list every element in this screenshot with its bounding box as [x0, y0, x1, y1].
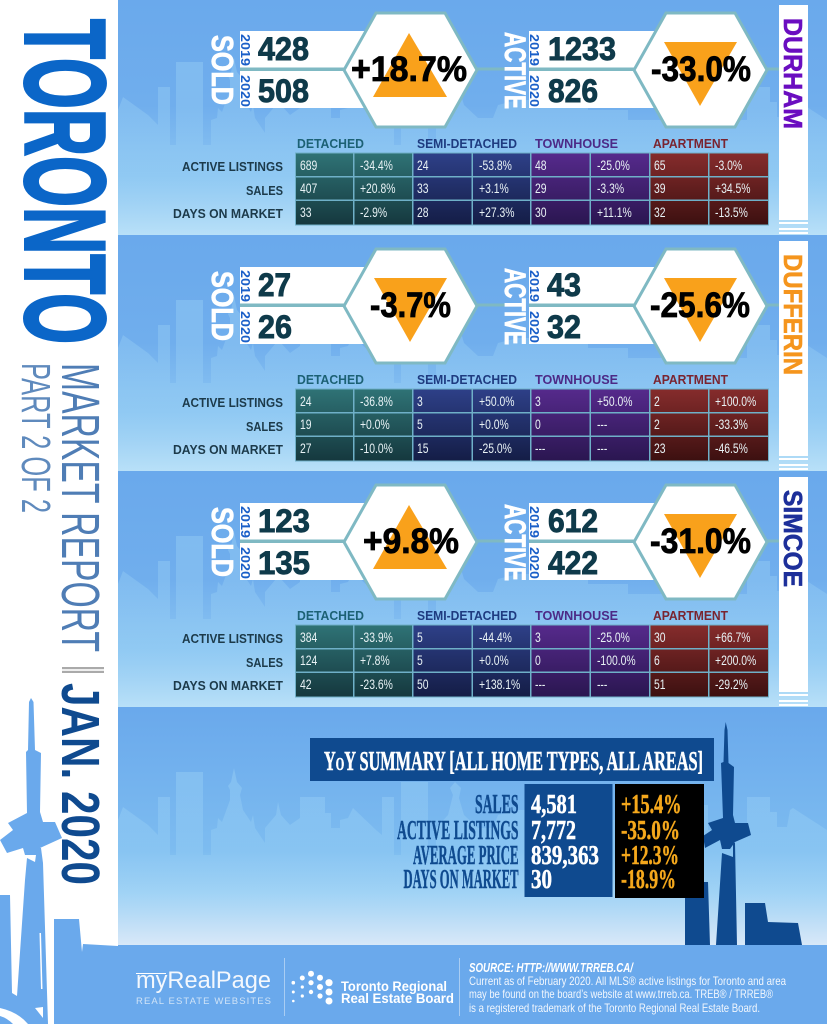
- table: Durham breakdown: 407: [300, 181, 318, 196]
- sold numbers: 135: [258, 545, 310, 581]
- table: Durham breakdown: +27.3%: [479, 205, 515, 220]
- summary changes: -35.0%: [621, 815, 680, 845]
- table: Dufferin breakdown: 3: [417, 394, 423, 409]
- table: Dufferin breakdown: 19: [300, 417, 312, 432]
- table: Durham breakdown: 33: [417, 181, 429, 196]
- active change: -33.0%: [651, 50, 751, 89]
- panel: Durham background: [118, 0, 827, 235]
- logo: myRealPage: [136, 967, 271, 1007]
- table: Dufferin breakdown: +0.0%: [479, 417, 509, 432]
- table: Simcoe breakdown: +138.1%: [479, 677, 521, 692]
- table: Simcoe breakdown: -23.6%: [360, 677, 393, 692]
- sold change: +18.7%: [351, 50, 467, 89]
- table: Simcoe breakdown: +0.0%: [479, 653, 509, 668]
- sold numbers: 26: [258, 309, 292, 345]
- table: Simcoe breakdown: ---: [535, 677, 545, 692]
- table: Dufferin breakdown: 27: [300, 441, 312, 456]
- footer dividers: [284, 958, 460, 1016]
- table: Durham breakdown: +3.1%: [479, 181, 509, 196]
- summary title: [310, 738, 714, 781]
- panel: YoY summary: AVERAGE PRICE: [413, 840, 518, 870]
- table: Simcoe breakdown: 51: [654, 677, 666, 692]
- sold numbers: [258, 267, 292, 345]
- table: Simcoe breakdown: 30: [654, 630, 666, 645]
- icon: down triangle: [664, 514, 737, 578]
- logo: myRealPage: REAL ESTATE WEBSITES: [136, 996, 271, 1007]
- table: Dufferin breakdown: 0: [535, 417, 541, 432]
- table: Dufferin breakdown: -33.3%: [715, 417, 748, 432]
- sold numbers: [258, 31, 309, 109]
- active numbers: [548, 31, 616, 109]
- table: Simcoe breakdown: 5: [417, 653, 423, 668]
- summary row labels: ACTIVE LISTINGS: [397, 815, 518, 845]
- sold change: -3.7%: [370, 286, 451, 325]
- table: Dufferin breakdown: 5: [417, 417, 423, 432]
- table: Dufferin breakdown: -10.0%: [360, 441, 393, 456]
- icon: down triangle sold: [374, 278, 447, 342]
- footer: [118, 945, 827, 1024]
- active numbers: 43: [547, 267, 581, 303]
- table: Durham breakdown: -2.9%: [360, 205, 387, 220]
- table: Durham breakdown: 28: [417, 205, 429, 220]
- table: Dufferin breakdown: ---: [535, 441, 545, 456]
- table: Dufferin breakdown: 2: [654, 417, 660, 432]
- table: Dufferin breakdown: -46.5%: [715, 441, 748, 456]
- table: Simcoe breakdown: +200.0%: [715, 653, 757, 668]
- logo: Toronto Regional Real Estate Board: Real Estate Board: [341, 991, 454, 1006]
- logo: myRealPage: myRealPage: [136, 967, 271, 994]
- table: Durham breakdown: 39: [654, 181, 666, 196]
- active numbers: 612: [548, 503, 598, 539]
- table: Durham breakdown: 689: [300, 158, 318, 173]
- active change: -31.0%: [650, 522, 751, 561]
- summary values: 7,772: [531, 815, 576, 845]
- active numbers: 422: [548, 545, 598, 581]
- table: Simcoe breakdown: 5: [417, 630, 423, 645]
- table: Dufferin breakdown: +50.0%: [479, 394, 515, 409]
- table: Durham breakdown: +11.1%: [597, 205, 632, 220]
- table: Durham breakdown: +20.8%: [360, 181, 396, 196]
- icon: CN Tower silhouette left: [0, 698, 118, 1024]
- separator bars: [62, 667, 104, 673]
- sold numbers: 123: [258, 503, 310, 539]
- table: Dufferin breakdown: 3: [535, 394, 541, 409]
- logo: Toronto Regional Real Estate Board: [292, 971, 454, 1006]
- date: Jan. 2020: JAN. 2020: [50, 683, 110, 885]
- region name: Dufferin: DUFFERIN: [778, 254, 808, 375]
- sold numbers: [258, 503, 310, 581]
- table: Durham breakdown: -13.5%: [715, 205, 748, 220]
- table: Dufferin breakdown: -36.8%: [360, 394, 393, 409]
- table: Simcoe breakdown: -100.0%: [597, 653, 636, 668]
- table: Dufferin breakdown: -25.0%: [479, 441, 512, 456]
- table: Durham breakdown: -25.0%: [597, 158, 630, 173]
- summary changes: +12.3%: [621, 840, 679, 870]
- source note: SOURCE: HTTP://WWW.TRREB.CA/: [469, 960, 634, 975]
- source note: [469, 960, 786, 1015]
- table: Durham breakdown: 65: [654, 158, 666, 173]
- panel: YoY summary: [310, 722, 802, 945]
- active change: -25.6%: [650, 286, 750, 325]
- summary values: 839,363: [531, 840, 599, 870]
- subtitle: Market Report: MARKET REPORT: [50, 363, 110, 652]
- table: Dufferin breakdown: +0.0%: [360, 417, 390, 432]
- table: Durham breakdown: 29: [535, 181, 547, 196]
- icon: down triangle active: [664, 278, 737, 342]
- table: Dufferin breakdown: 24: [300, 394, 312, 409]
- table: Durham breakdown: 24: [417, 158, 429, 173]
- sold numbers: 27: [258, 267, 291, 303]
- table: Simcoe breakdown: -44.4%: [479, 630, 512, 645]
- region name: Simcoe: SIMCOE: [778, 490, 808, 587]
- table: Durham breakdown: +34.5%: [715, 181, 751, 196]
- panel: left title column: [0, 0, 128, 1024]
- icon: CN Tower and buildings right: [685, 722, 802, 945]
- table: Simcoe breakdown: 6: [654, 653, 660, 668]
- table: Simcoe breakdown: -25.0%: [597, 630, 630, 645]
- active numbers: 32: [547, 309, 581, 345]
- summary values: 30: [531, 864, 552, 894]
- table: Dufferin breakdown: +50.0%: [597, 394, 633, 409]
- section: Simcoe stats: [173, 477, 808, 706]
- table: Simcoe breakdown: 0: [535, 653, 541, 668]
- logo: Toronto Regional Real Estate Board: Toronto Regional: [341, 979, 447, 994]
- table: Dufferin breakdown: 2: [654, 394, 660, 409]
- panel: summary background: [118, 710, 827, 945]
- table: Simcoe breakdown: 50: [417, 677, 429, 692]
- table: Simcoe breakdown: +66.7%: [715, 630, 751, 645]
- icon: up triangle: [373, 33, 447, 97]
- summary values: 4,581: [531, 789, 577, 819]
- panel: YoY summary: DAYS ON MARKET: [404, 864, 518, 894]
- icon: up triangle: [373, 505, 447, 569]
- table: Durham breakdown: 30: [535, 205, 547, 220]
- source note: is a registered trademark of the Toronto Regional Real Estate Board.: [469, 1001, 760, 1015]
- section: Dufferin stats: [173, 241, 808, 470]
- sold numbers: 508: [258, 73, 309, 109]
- active numbers: [548, 503, 598, 581]
- table: Durham breakdown: 48: [535, 158, 547, 173]
- active numbers: [547, 267, 581, 345]
- table: Dufferin breakdown: 23: [654, 441, 666, 456]
- active numbers: 826: [548, 73, 598, 109]
- table: Durham breakdown: 33: [300, 205, 312, 220]
- table: Durham breakdown: 32: [654, 205, 666, 220]
- summary row labels: [397, 789, 518, 894]
- subtitle: Part 2 of 2: PART 2 OF 2: [13, 363, 59, 513]
- table: Simcoe breakdown: 384: [300, 630, 318, 645]
- icon: down triangle: [664, 42, 737, 106]
- summary values: [524, 784, 612, 897]
- summary changes: +15.4%: [621, 789, 682, 819]
- table: Durham breakdown: -34.4%: [360, 158, 393, 173]
- table: Dufferin breakdown: ---: [597, 417, 607, 432]
- table: Durham breakdown: -3.0%: [715, 158, 742, 173]
- region name: Durham: DURHAM: [778, 18, 808, 129]
- table: Durham breakdown: -3.3%: [597, 181, 624, 196]
- table: Simcoe breakdown: 124: [300, 653, 318, 668]
- panel: Dufferin background: [118, 238, 827, 471]
- sold numbers: 428: [258, 31, 309, 67]
- table: Dufferin breakdown: 15: [417, 441, 429, 456]
- title: Toronto: TORONTO: [0, 19, 128, 344]
- table: Simcoe breakdown: 42: [300, 677, 312, 692]
- table: Dufferin breakdown: +100.0%: [715, 394, 757, 409]
- table: Simcoe breakdown: +7.8%: [360, 653, 390, 668]
- table: Durham breakdown: -53.8%: [479, 158, 512, 173]
- table: Durham breakdown: [295, 152, 769, 226]
- summary changes: [615, 784, 704, 898]
- active numbers: 1233: [548, 31, 616, 67]
- sold change: +9.8%: [363, 522, 459, 561]
- table: Dufferin breakdown: [295, 388, 769, 462]
- table: Simcoe breakdown: ---: [597, 677, 607, 692]
- summary row labels: SALES: [475, 789, 518, 819]
- summary changes: -18.9%: [621, 864, 676, 894]
- table: Simcoe breakdown: 3: [535, 630, 541, 645]
- table: Simcoe breakdown: -33.9%: [360, 630, 393, 645]
- section: Durham stats: [173, 5, 808, 234]
- panel: Simcoe background: [118, 474, 827, 707]
- table: Simcoe breakdown: -29.2%: [715, 677, 748, 692]
- table: Dufferin breakdown: ---: [597, 441, 607, 456]
- table: Simcoe breakdown: [295, 624, 769, 698]
